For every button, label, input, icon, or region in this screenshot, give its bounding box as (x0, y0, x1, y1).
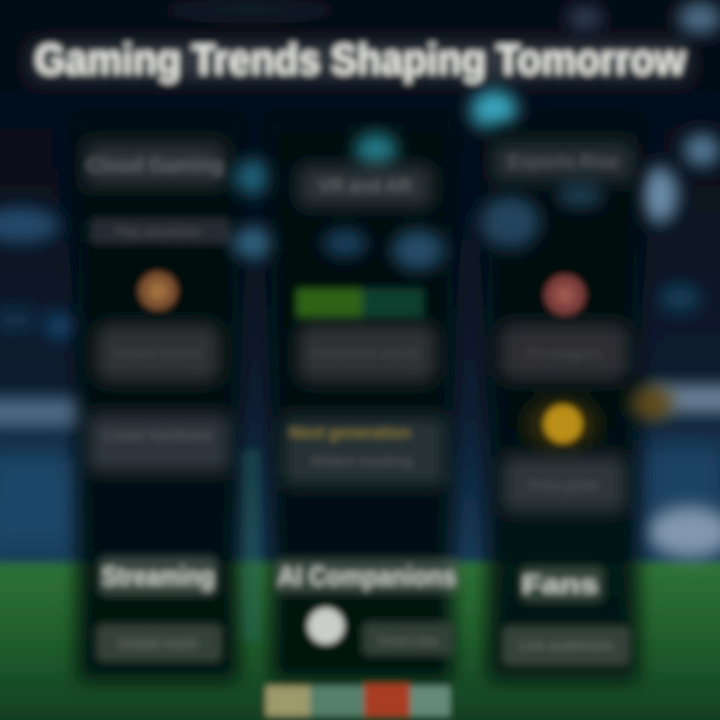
icon: gold coin (524, 396, 600, 452)
text block: left card 1 (96, 324, 220, 382)
panel: right column (480, 125, 673, 680)
text block: left card 2 (88, 414, 230, 472)
heading: left column: Cloud Gaming (87, 155, 223, 177)
text block: right footer (502, 626, 630, 666)
icon: orange badge (139, 272, 177, 310)
legend: bottom colored swatches (266, 684, 450, 716)
text block: left footer (96, 624, 222, 662)
heading: center lower label: AI Companions (278, 561, 456, 591)
text block: center card 2 with gold highlight: Motion tracking (311, 453, 413, 470)
text block: right footer: Live audiences (519, 637, 613, 653)
text block: center card 2 with gold highlight: Next generation (290, 425, 410, 442)
text block: center footer (362, 622, 454, 656)
icon: red badge (545, 275, 585, 315)
icon: amber light (631, 386, 673, 420)
text block: center card 1 (298, 324, 436, 382)
heading: right column (492, 142, 634, 182)
text block: center card 2 with gold highlight (282, 416, 446, 486)
heading: left lower label: Streaming (102, 561, 214, 591)
heading: left lower label (98, 556, 218, 596)
icon: cyan hexagon near title (471, 90, 517, 130)
icon: blue node group (480, 183, 604, 248)
text block: right card 2 (502, 456, 626, 512)
icon: blue node (232, 228, 278, 258)
panel: left column (78, 125, 278, 680)
text block: left intro: Play anywhere (115, 224, 201, 239)
text block: left card 1: Instant access (113, 345, 203, 361)
icon: white ball (308, 608, 344, 644)
heading: left column (85, 142, 225, 187)
text block: left intro (90, 218, 230, 244)
heading: center column: VR and AR (319, 176, 411, 196)
panel: center column (272, 125, 459, 680)
heading: right column: Esports Rise (508, 152, 618, 172)
icon: cyan node (234, 160, 272, 194)
heading: center column (298, 165, 432, 207)
text block: left footer: Global reach (118, 635, 198, 651)
icon: green progress bar (296, 288, 424, 318)
text block: right card 1: Pro leagues (527, 345, 601, 361)
text block: right card 2: Prize pools (529, 477, 599, 493)
icon: cyan top node (355, 133, 397, 167)
text block: center footer: Smart play (377, 633, 440, 648)
text block: left card 2: Lower hardware (104, 427, 212, 444)
divider post between columns (242, 450, 260, 640)
text block: right card 1 (500, 324, 628, 380)
heading: right lower label (520, 566, 604, 602)
icon: blue node cluster (323, 229, 444, 270)
text block: center card 1: Immersive worlds (312, 345, 420, 361)
heading: right lower label: Fans (522, 571, 598, 599)
